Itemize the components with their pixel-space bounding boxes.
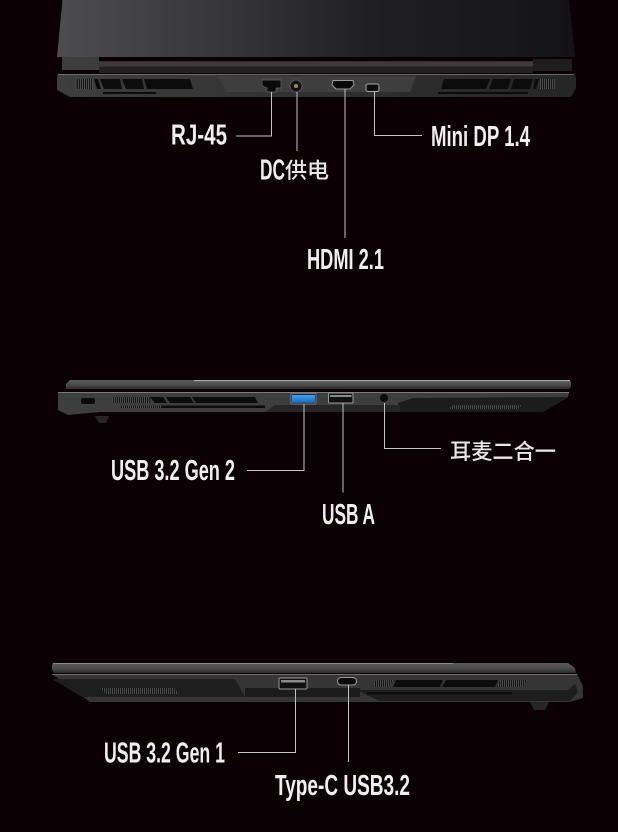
callout: Type-C [275, 685, 410, 802]
lock slot [81, 398, 95, 404]
laptop: rear view [57, 0, 576, 97]
port: USB 3.2 Gen 1 [279, 678, 307, 689]
callout: USB 3.2 Gen 1: USB 3.2 Gen 1 [104, 738, 225, 770]
callout: USB 3.2 Gen 1 [104, 689, 296, 770]
callout: audio combo: 耳麦二合一 [450, 440, 556, 464]
vents [367, 680, 527, 694]
base [52, 674, 583, 702]
callout: Mini DP: Mini DP 1.4 [431, 121, 530, 153]
callout: RJ-45 [171, 92, 272, 152]
callout: USB A [322, 403, 375, 531]
foot [530, 702, 549, 710]
callout: USB 3.2 Gen 2: USB 3.2 Gen 2 [111, 455, 235, 487]
vents [112, 397, 265, 408]
port: HDMI [332, 80, 354, 89]
port: RJ-45 [262, 80, 281, 92]
laptop: right side view [52, 663, 583, 710]
port: Type-C [338, 678, 356, 685]
port: USB A [328, 393, 353, 403]
port panel [218, 76, 416, 92]
speaker [100, 688, 179, 694]
callout: DC: 供电 [285, 159, 329, 183]
port: audio [380, 394, 388, 402]
callout: HDMI: HDMI 2.1 [307, 244, 384, 276]
left vents [77, 79, 193, 94]
lid [57, 0, 575, 57]
wedge [52, 679, 245, 697]
wedge [398, 397, 567, 412]
lid [66, 380, 571, 389]
callout: DC [260, 92, 329, 186]
port: DC [290, 80, 302, 92]
base [57, 74, 576, 97]
callout: USB A: USB A [322, 499, 375, 531]
right vents [438, 79, 555, 94]
port: Mini DP [366, 84, 379, 92]
port: USB 3.2 Gen 2 [291, 394, 316, 404]
callout: Type-C: Type-C USB3.2 [275, 770, 410, 802]
speaker [448, 405, 522, 409]
callout: DC: DC [260, 154, 285, 186]
callout: audio combo [384, 403, 556, 464]
laptop: left side view [58, 380, 571, 423]
callout: RJ-45: RJ-45 [171, 120, 227, 152]
base [58, 392, 569, 415]
callout: USB 3.2 Gen 2 [111, 404, 304, 487]
foot [95, 416, 109, 423]
lid [52, 663, 576, 673]
callout: Mini DP [374, 92, 530, 153]
